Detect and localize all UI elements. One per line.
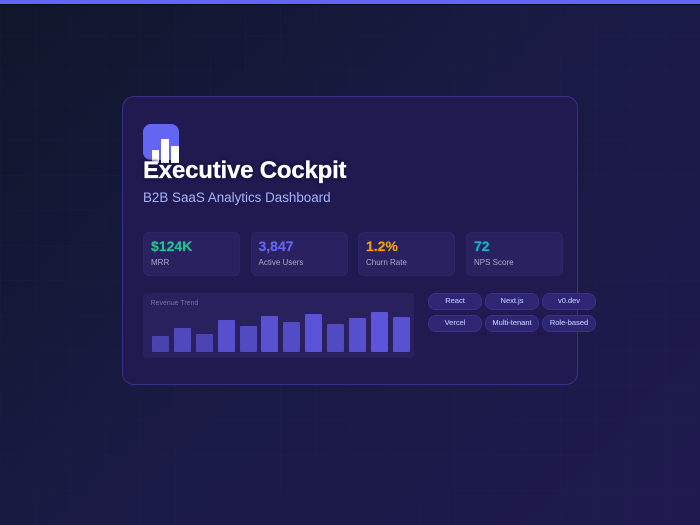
- stat card: MRR: $124K: [151, 238, 192, 254]
- tags: tech stack: Vercel: [445, 318, 465, 327]
- stat card: Active Users: Active Users: [258, 258, 303, 266]
- stat card: Churn Rate: Churn Rate: [366, 258, 407, 266]
- tags: tech stack: Multi-tenant: [492, 318, 532, 327]
- panel: revenue trend chart: [143, 293, 414, 358]
- stat card: Active Users: 3,847: [258, 238, 294, 254]
- chart title: Revenue Trend: [150, 300, 198, 306]
- stat card: NPS Score: [466, 232, 563, 276]
- stat card: MRR: MRR: [151, 258, 169, 266]
- stat card: Churn Rate: [358, 232, 455, 276]
- tags: tech stack: React: [445, 296, 465, 305]
- stat card: Active Users: [250, 232, 348, 276]
- stat card: NPS Score: NPS Score: [474, 258, 514, 266]
- top accent bar: [0, 0, 700, 4]
- subtitle: B2B SaaS Analytics Dashboard: [143, 190, 331, 205]
- panel: main card: [122, 96, 578, 385]
- stat card: MRR: [143, 232, 240, 276]
- title: Executive Cockpit: [143, 157, 346, 184]
- icon: bar chart logo: [143, 124, 179, 163]
- tags: tech stack: [428, 293, 596, 332]
- tags: tech stack: Next.js: [501, 296, 523, 305]
- tags: tech stack: Role-based: [550, 318, 588, 327]
- tags: tech stack: v0.dev: [558, 296, 580, 305]
- stat card: Churn Rate: 1.2%: [366, 238, 398, 254]
- stat card: NPS Score: 72: [474, 238, 490, 254]
